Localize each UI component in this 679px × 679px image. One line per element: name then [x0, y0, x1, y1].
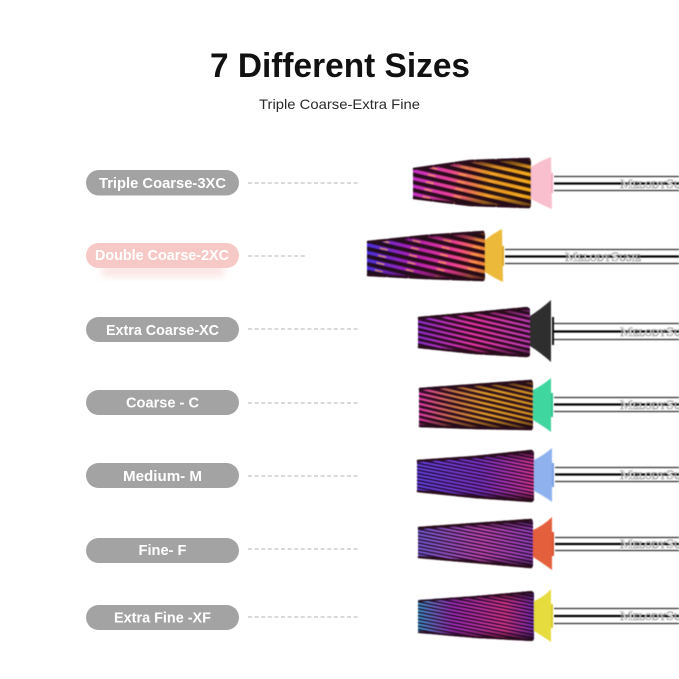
drill bit: M	[417, 448, 679, 502]
label pill	[86, 317, 239, 342]
subtitle: Triple Coarse-Extra Fine	[259, 96, 420, 112]
label pill	[86, 605, 239, 630]
drill bit: XC	[418, 300, 679, 362]
label pill: Extra Fine -XF	[114, 610, 211, 626]
label pill: Medium- M	[123, 468, 202, 485]
row: Extra Coarse-XC	[86, 300, 679, 362]
label pill: Double Coarse-2XC	[95, 247, 229, 264]
drill bit: C	[419, 378, 679, 432]
label pill	[86, 463, 239, 488]
label pill	[86, 390, 239, 415]
row: Fine- F	[86, 517, 679, 570]
drill bit: 2XC	[367, 229, 679, 282]
label pill: Fine- F	[138, 542, 186, 559]
label pill: Triple Coarse-3XC	[99, 175, 226, 192]
drill bit: 2XC: MelodySusie	[565, 249, 642, 264]
label pill	[86, 170, 239, 196]
label pill: Extra Coarse-XC	[106, 322, 219, 339]
drill bit: XF	[418, 589, 679, 642]
title: 7 Different Sizes	[210, 47, 470, 85]
label pill: Coarse - C	[126, 394, 199, 412]
soft shadow under pill	[102, 266, 224, 276]
row: Triple Coarse-3XC	[86, 157, 679, 209]
drill bit: F	[418, 517, 679, 570]
label pill	[86, 538, 239, 563]
row: Medium- M	[86, 448, 679, 502]
row: Double Coarse-2XC	[86, 229, 679, 282]
row: Extra Fine -XF	[86, 589, 679, 642]
row: Coarse - C	[86, 378, 679, 432]
label pill	[86, 243, 239, 268]
drill bit: 3XC	[413, 157, 679, 209]
